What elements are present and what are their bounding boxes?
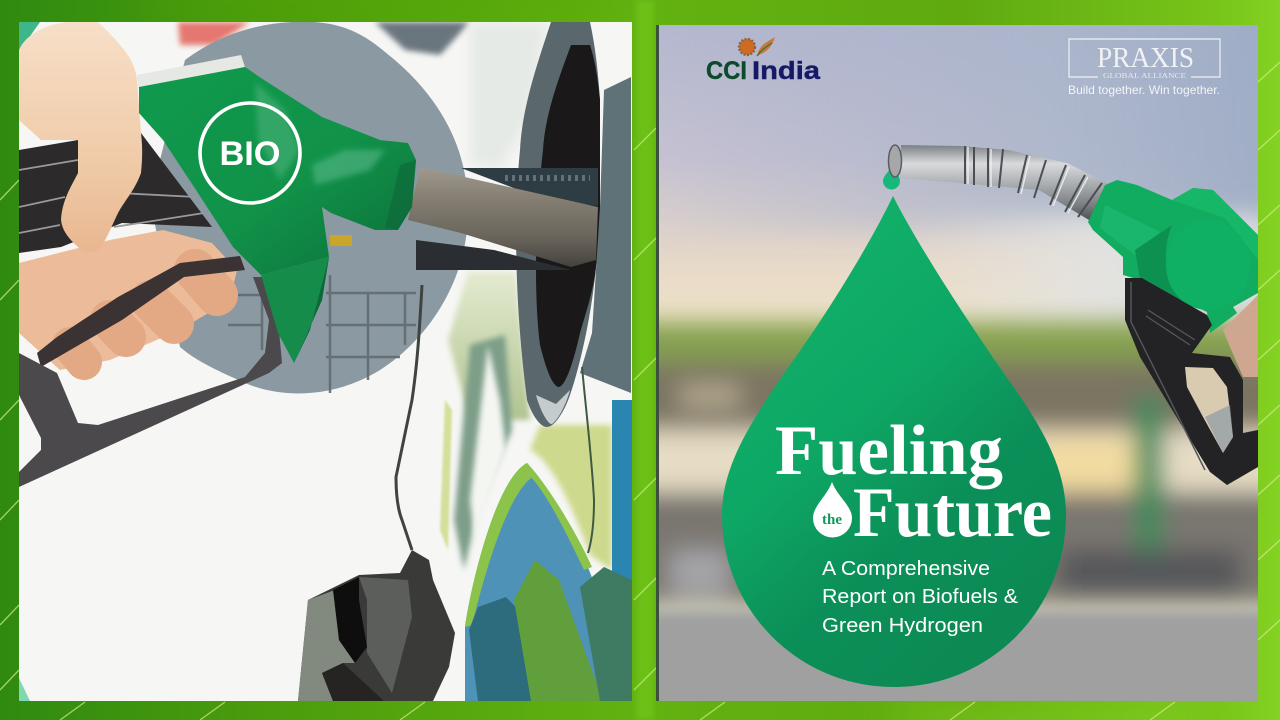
hand: palm and fingers bbox=[19, 230, 237, 370]
subtitle: A Comprehensive bbox=[822, 558, 990, 580]
hand: upper palm and thumb bbox=[19, 21, 142, 252]
subtitle: Green Hydrogen bbox=[822, 615, 983, 637]
car body colour stripes bbox=[440, 272, 632, 701]
left panel edge bbox=[656, 25, 659, 701]
fuel door disc bbox=[150, 22, 468, 393]
CCI India logo: CCI bbox=[706, 57, 747, 85]
black nozzle grip bbox=[1125, 278, 1258, 485]
panel: biofuel nozzle photo bbox=[19, 21, 632, 701]
green nozzle body bbox=[137, 55, 416, 363]
black handle bbox=[19, 133, 212, 253]
CCI India logo bbox=[706, 37, 820, 80]
dark frame behind spout bbox=[416, 168, 598, 270]
title: Fueling the Future: Fueling bbox=[775, 412, 1003, 490]
trigger guard bbox=[19, 277, 282, 487]
icon: small drop with the bbox=[813, 482, 852, 538]
BIO badge: BIO bbox=[220, 135, 280, 173]
panel: report cover bbox=[656, 25, 1258, 701]
title: Fueling the Future: Future bbox=[853, 474, 1052, 552]
fuel cap tether and cap bbox=[298, 285, 594, 701]
Praxis Global Alliance logo: Build together. Win together. bbox=[1068, 83, 1220, 97]
Praxis Global Alliance logo: PRAXIS bbox=[1097, 42, 1194, 74]
BIO badge bbox=[200, 103, 300, 203]
Praxis Global Alliance logo: GLOBAL ALLIANCE bbox=[1103, 71, 1186, 80]
green nozzle body bbox=[1088, 180, 1258, 333]
CCI India logo: India bbox=[752, 57, 821, 85]
icon: small drop with the: the bbox=[822, 512, 842, 528]
Praxis Global Alliance logo bbox=[1068, 39, 1220, 97]
hand on nozzle bbox=[1223, 295, 1258, 377]
subtitle bbox=[822, 558, 1019, 637]
metal nozzle spout bbox=[888, 145, 1115, 220]
trigger lever bbox=[37, 256, 245, 367]
green fuel drop bbox=[722, 196, 1066, 687]
falling droplet bbox=[883, 170, 900, 190]
blurred petrol station bbox=[620, 322, 1280, 720]
nozzle spout bbox=[408, 167, 598, 267]
fuel filler ring bbox=[516, 22, 631, 427]
subtitle: Report on Biofuels & bbox=[822, 586, 1019, 608]
title: Fueling the Future bbox=[776, 424, 1050, 538]
